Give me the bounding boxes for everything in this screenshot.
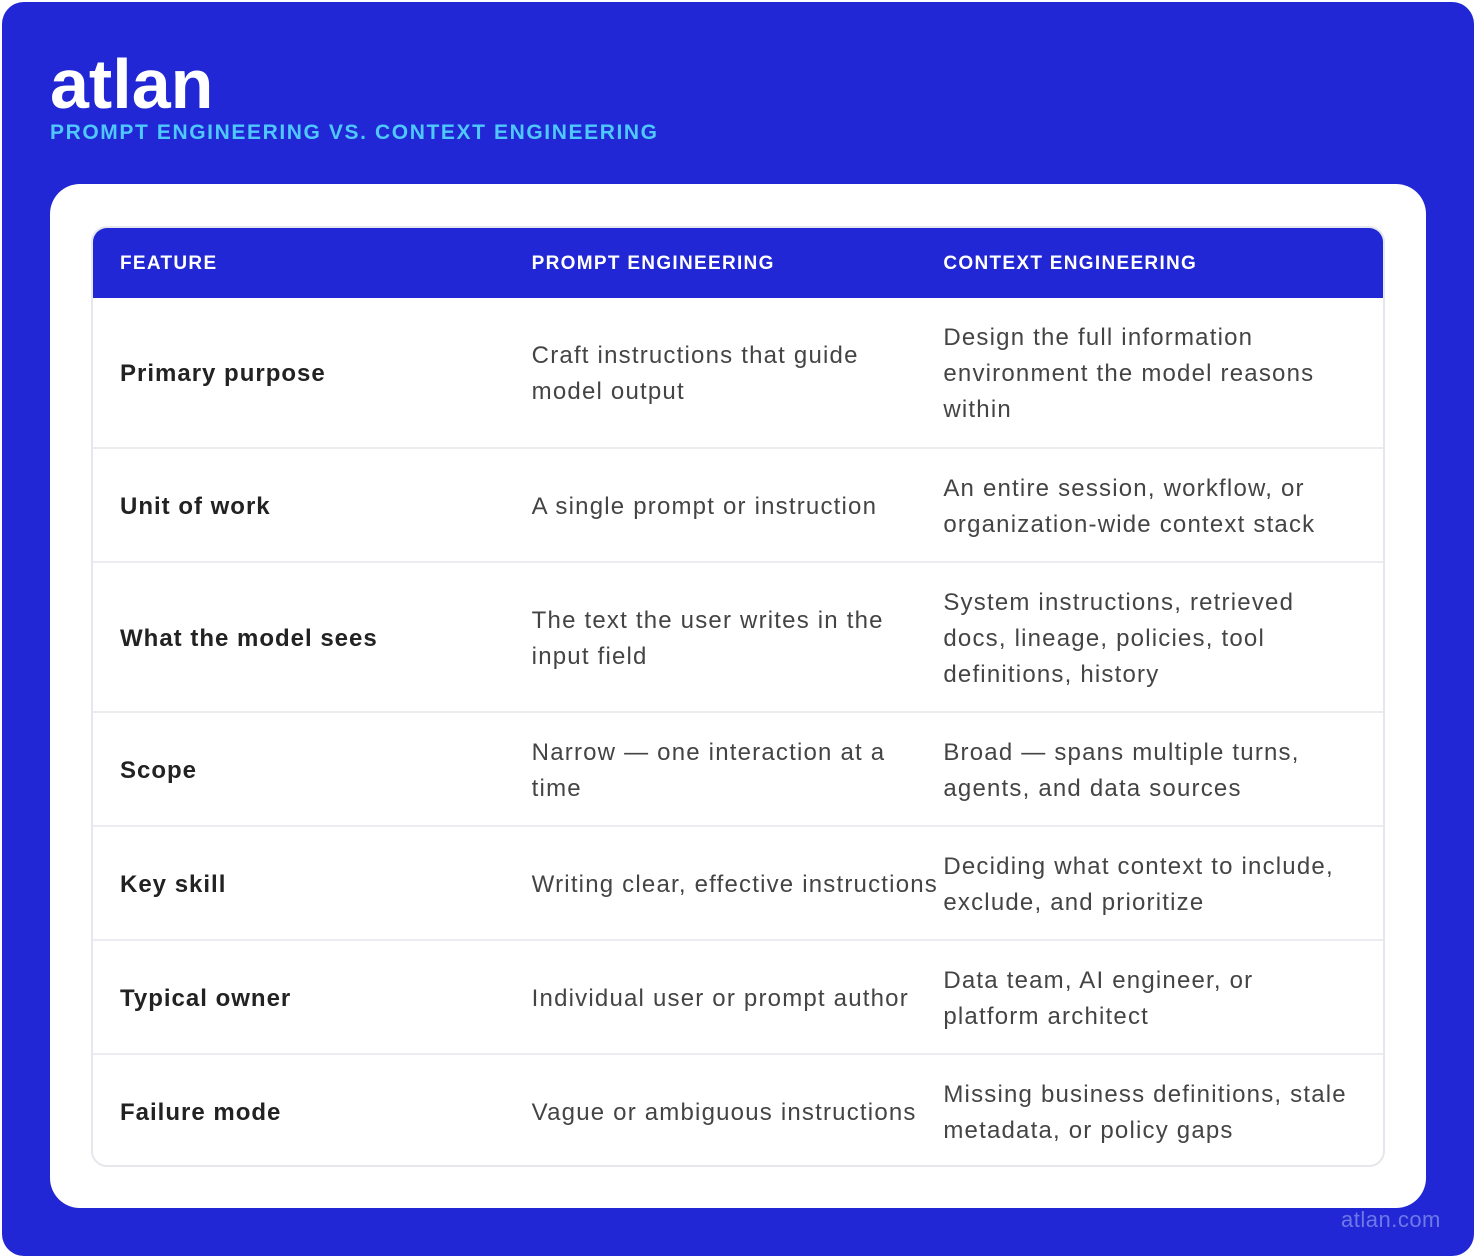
row: scope: Scope — [120, 756, 197, 784]
row: key skill: Writing clear, effective instructions — [532, 870, 938, 898]
row: unit of work: An entire session, workflow, or — [943, 474, 1305, 502]
row: unit of work — [93, 447, 1383, 561]
subtitle: PROMPT ENGINEERING VS. CONTEXT ENGINEERING — [50, 121, 659, 144]
comparison table — [91, 226, 1385, 1167]
row: what model sees: input field — [532, 642, 648, 670]
logo: atlan — [50, 45, 213, 123]
row: failure mode: metadata, or policy gaps — [943, 1116, 1234, 1144]
row: what model sees: The text the user writes in the — [532, 606, 884, 634]
table header: CONTEXT ENGINEERING — [943, 253, 1197, 274]
row: what model sees: System instructions, retrieved — [943, 588, 1294, 616]
row: what model sees: What the model sees — [120, 624, 378, 652]
row: failure mode: Vague or ambiguous instructions — [532, 1098, 917, 1126]
footer url: atlan.com — [1341, 1207, 1441, 1232]
row: what model sees: definitions, history — [943, 660, 1159, 688]
row: scope: Narrow — one interaction at a — [532, 738, 885, 766]
row: scope: time — [532, 774, 582, 802]
row: failure mode: Failure mode — [120, 1098, 281, 1126]
row: primary purpose: Craft instructions that guide — [532, 342, 859, 369]
row: scope: agents, and data sources — [943, 774, 1242, 802]
row: unit of work: A single prompt or instruction — [532, 492, 877, 520]
row: key skill: exclude, and prioritize — [943, 888, 1204, 916]
row: failure mode: Missing business definitions, stale — [943, 1080, 1347, 1108]
table header — [93, 228, 1383, 298]
row: scope: Broad — spans multiple turns, — [943, 738, 1300, 766]
row: key skill: Deciding what context to include, — [943, 852, 1334, 880]
row: primary purpose: environment the model reasons — [943, 360, 1314, 387]
row: typical owner: platform architect — [943, 1002, 1149, 1030]
row: primary purpose: Design the full information — [943, 324, 1253, 351]
row: scope — [93, 711, 1383, 825]
row: primary purpose — [120, 324, 1314, 423]
table header: PROMPT ENGINEERING — [532, 253, 775, 274]
row: typical owner: Data team, AI engineer, or — [943, 966, 1253, 994]
row: what model sees — [93, 561, 1383, 711]
row: primary purpose: within — [943, 396, 1012, 423]
row: failure mode — [93, 1053, 1383, 1167]
row: unit of work: organization-wide context stack — [943, 510, 1315, 538]
row: key skill: Key skill — [120, 870, 226, 898]
row: unit of work: Unit of work — [120, 492, 271, 520]
row: primary purpose: Primary purpose — [120, 360, 326, 387]
row: key skill — [93, 825, 1383, 939]
table header: FEATURE — [120, 253, 217, 274]
row: typical owner: Typical owner — [120, 984, 291, 1012]
row: what model sees: docs, lineage, policies, tool — [943, 624, 1265, 652]
row: typical owner — [93, 939, 1383, 1053]
row: typical owner: Individual user or prompt author — [532, 984, 909, 1012]
panel: card — [50, 184, 1426, 1208]
row: primary purpose: model output — [532, 378, 685, 405]
